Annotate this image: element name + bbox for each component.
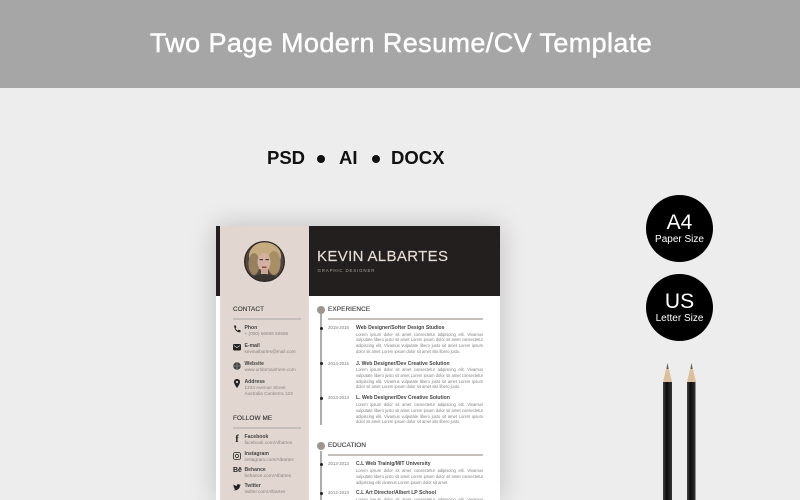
panel: resume sidebar (216, 226, 309, 500)
icon: phone (234, 326, 240, 332)
address text: Address (244, 379, 265, 385)
heading: experience: EXPERIENCE (328, 306, 370, 313)
icon: mail (233, 344, 241, 350)
section: education (317, 442, 366, 450)
social: twitter (233, 483, 286, 494)
contact: website: www.urldomainhere.com (244, 367, 296, 372)
icon: globe (233, 362, 241, 370)
job 1: Web Designer/Softer Design Studios (356, 325, 444, 331)
social: instagram: instagram.com/Albartes (244, 457, 294, 462)
bullet (317, 154, 325, 162)
contact: website (233, 361, 296, 372)
email text: E-mail (244, 343, 260, 349)
icon: behance: Bē (233, 467, 242, 474)
icon: experience (317, 306, 325, 314)
social: behance: behance.com/Albartes (244, 473, 291, 478)
job 2 (320, 360, 483, 389)
badge: US letter size (646, 274, 713, 340)
education 2: C.L Art Director/Albert LP School (356, 490, 436, 496)
icon: instagram (233, 452, 241, 460)
education 2 (320, 490, 483, 500)
twitter text: Twitter (244, 483, 261, 489)
icon: map pin (234, 379, 240, 388)
contact: phone (234, 325, 288, 336)
job 3: 2013-2014 (328, 395, 349, 400)
badge: A4 paper size: A4 (667, 210, 692, 234)
job 1 (320, 325, 483, 354)
phone text: Phon (244, 325, 257, 331)
bullet (372, 154, 380, 162)
sidebar fill (220, 226, 309, 500)
job 1: dolor sit amet Lorem ipsum dolor sit amet sits libero justo. (356, 349, 460, 354)
format: DOCX: DOCX (391, 147, 444, 168)
education 2: 2012-2013 (328, 490, 349, 495)
badge: A4 paper size: Paper Size (655, 234, 704, 245)
education 1: Lorem ipsum dolor sit amet consectetur adipiscing elit. Vivamus (356, 468, 483, 473)
education 1 (320, 461, 483, 485)
icon: pencils (663, 363, 696, 500)
job 2: J. Web Designer/Dev Creative Solution (356, 360, 450, 366)
icon: twitter (233, 484, 241, 490)
format list (267, 147, 444, 168)
job 3: dolor sit amet Lorem ipsum dolor sit amet sits libero justo. (356, 419, 460, 424)
resume page (216, 226, 500, 500)
contact: address: 1234 Avenue Street (244, 385, 286, 390)
job 2: 2014-2015 (328, 360, 349, 366)
contact: address (234, 379, 293, 396)
black edge strip (216, 226, 220, 296)
website text: Website (244, 361, 264, 367)
social: instagram (233, 451, 294, 462)
job 1: vulputate libero justo sit amet Lorem ipsum dolor sit amet consectetur (356, 337, 483, 342)
job 2: dolor sit amet Lorem ipsum dolor sit amet sits libero justo. (356, 384, 460, 389)
education 1: adipiscing elit vivamus Lorem ipsum dolor sit amet. (356, 480, 448, 485)
badge: A4 paper size (646, 194, 713, 262)
job 3: vulputate libero justo sit amet Lorem ipsum dolor sit amet consectetur (356, 408, 483, 413)
behance text: Behance (244, 467, 266, 473)
name: KEVIN ALBARTES (317, 248, 448, 265)
instagram text: Instagram (244, 451, 269, 457)
job 3: L. Web Designer/Dev Creative Solution (356, 395, 450, 401)
portrait (244, 241, 285, 282)
section: experience (317, 306, 370, 314)
social: facebook (235, 434, 292, 445)
format: PSD: PSD (267, 147, 305, 168)
heading: education: EDUCATION (328, 442, 366, 449)
icon: facebook: f (235, 434, 239, 445)
social: facebook: facebook.com/Albartes (244, 440, 292, 445)
contact: email (233, 343, 296, 354)
education 1: vulputate libero justo sit amet Lorem ipsum dolor sit amet consectetur (356, 474, 483, 479)
job 2: vulputate libero justo sit amet Lorem ipsum dolor sit amet consectetur (356, 373, 483, 378)
education 1: C.L Web Trainig/MIT University (356, 461, 431, 467)
format: AI: AI (339, 147, 358, 168)
facebook text: Facebook (244, 434, 268, 440)
job 3: adipiscing elit. Vivamus vulputate libero justo sit amet Lorem ipsum (356, 414, 483, 419)
job 1: adipiscing elit. Vivamus vulputate libero justo sit amet Lorem ipsum (356, 343, 483, 348)
icon: education (317, 442, 325, 450)
job 1: 2015-2016 (328, 325, 349, 330)
contact: address: Australia Canberra 123 (244, 391, 293, 396)
sidebar heading: contact: CONTACT (233, 306, 264, 313)
title: Two Page Modern Resume/CV Template (150, 28, 652, 58)
contact: email: kevinalbartes@mail.com (244, 349, 296, 354)
contact: phone: + (000) 66666 66666 (244, 331, 288, 336)
job 2: adipiscing elit. Vivamus vulputate libero justo sit amet Lorem ipsum (356, 379, 483, 384)
job 1: Lorem ipsum dolor sit amet consectetur adipiscing elit. Vivamus (356, 332, 483, 336)
social: twitter: twitter.com/Albartes (244, 489, 285, 494)
social: behance (233, 467, 291, 478)
title banner (0, 0, 800, 88)
badge: US letter size: US (665, 290, 694, 312)
education 1: 2012-2013 (328, 461, 349, 466)
sidebar heading: follow me: FOLLOW ME (233, 415, 272, 422)
job 2: Lorem ipsum dolor sit amet consectetur adipiscing elit. Vivamus (356, 367, 483, 372)
job 3: Lorem ipsum dolor sit amet consectetur adipiscing elit. Vivamus (356, 402, 483, 407)
job title: GRAPHIC DESIGNER (318, 268, 375, 272)
job 3 (320, 395, 483, 424)
panel: resume header (309, 226, 500, 296)
badge: US letter size: Letter Size (656, 313, 703, 324)
